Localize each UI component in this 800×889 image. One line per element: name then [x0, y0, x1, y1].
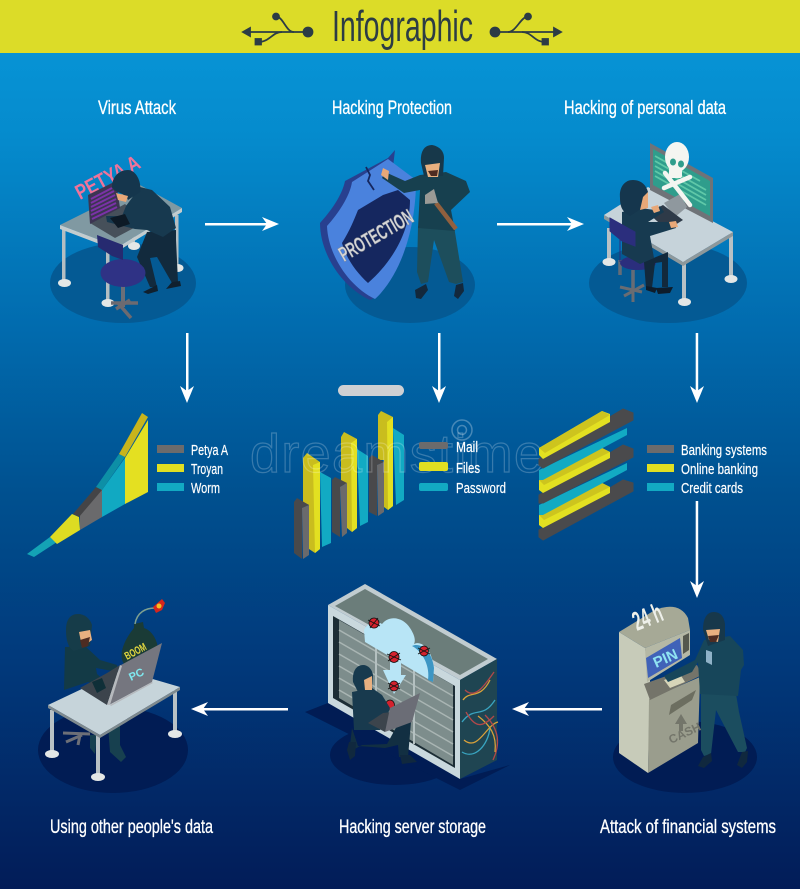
arrow down: personal data — [690, 333, 704, 403]
icon: bugs — [368, 618, 430, 710]
stacked bar chart: banking — [539, 409, 633, 540]
heading: Hacking Protection: Hacking Protection — [332, 98, 452, 119]
heading: Using other people's data: Using other people's data — [50, 817, 213, 838]
cloud — [364, 618, 434, 694]
bomb — [122, 599, 165, 664]
label: 24 h: 24 h — [628, 598, 667, 637]
icon: skull and crossbones — [664, 142, 690, 205]
scene: using other people's data — [38, 599, 188, 793]
heading: Hacking of personal data: Hacking of personal data — [564, 98, 726, 119]
desk top — [604, 187, 733, 262]
area chart: virus attack — [27, 413, 148, 557]
legend: banking: Online banking — [681, 461, 758, 478]
legend: data types: Mail — [456, 439, 478, 456]
monitor — [650, 142, 713, 223]
keyboard — [648, 205, 683, 230]
shield — [320, 150, 418, 300]
label: CASH: CASH — [666, 720, 703, 747]
watermark: dreamstime — [250, 424, 544, 484]
arrow 1 — [205, 217, 279, 231]
legend: data types: Files — [456, 460, 480, 477]
scene: hacking of personal data — [589, 142, 747, 323]
label: PIN: PIN — [651, 646, 680, 672]
header band — [0, 0, 800, 53]
title: Infographic — [332, 2, 473, 51]
hacker with hammer — [381, 145, 470, 299]
legend: data types — [419, 439, 506, 497]
desk legs — [58, 215, 184, 307]
cables — [462, 672, 498, 760]
desk top — [48, 670, 180, 735]
chair back — [610, 218, 635, 262]
hacker — [106, 170, 181, 294]
label: PROTECTION: PROTECTION — [335, 205, 418, 266]
arrow down: virus — [180, 333, 194, 403]
legend: banking — [647, 442, 767, 497]
legend: virus types: Petya A — [191, 442, 228, 459]
legend: virus types: Worm — [191, 480, 220, 497]
desk top — [60, 185, 182, 247]
scene: virus attack hacker at desk — [50, 151, 196, 323]
arrow down: protection — [432, 333, 446, 403]
legend: virus types: Troyan — [191, 461, 223, 478]
bar chart: protection — [294, 411, 404, 559]
scene: server hacking — [305, 584, 510, 790]
pill — [338, 385, 404, 396]
label: PETYA A: PETYA A — [72, 151, 144, 204]
laptop — [90, 204, 145, 238]
scene: ATM attack — [613, 598, 757, 793]
heading: Virus Attack: Virus Attack — [98, 98, 176, 119]
hacker at laptop — [63, 614, 126, 762]
chair — [97, 235, 146, 318]
server rack — [328, 584, 498, 779]
heading: Hacking server storage: Hacking server storage — [339, 817, 486, 838]
arrow left: server to laptop — [191, 702, 288, 716]
hacker at ATM — [664, 612, 748, 768]
desk legs — [602, 228, 738, 306]
icon: usb right — [490, 14, 561, 44]
arrow 2 — [497, 217, 584, 231]
scene: hacking protection shield — [320, 145, 475, 323]
legend: virus types — [157, 442, 228, 497]
hacker — [620, 180, 678, 294]
legend: banking: Banking systems — [681, 442, 767, 459]
atm machine — [619, 598, 703, 773]
hacker with laptop — [347, 665, 420, 764]
legend: data types: Password — [456, 480, 506, 497]
arrow left: ATM to server — [512, 702, 602, 716]
laptop — [80, 643, 162, 706]
chair — [620, 256, 656, 302]
legend: banking: Credit cards — [681, 480, 743, 497]
label: BOOM: BOOM — [123, 641, 149, 663]
label: PC: PC — [127, 666, 146, 684]
icon: usb left — [243, 14, 312, 44]
arrow down: to ATM — [690, 501, 704, 598]
desk legs — [45, 690, 182, 781]
